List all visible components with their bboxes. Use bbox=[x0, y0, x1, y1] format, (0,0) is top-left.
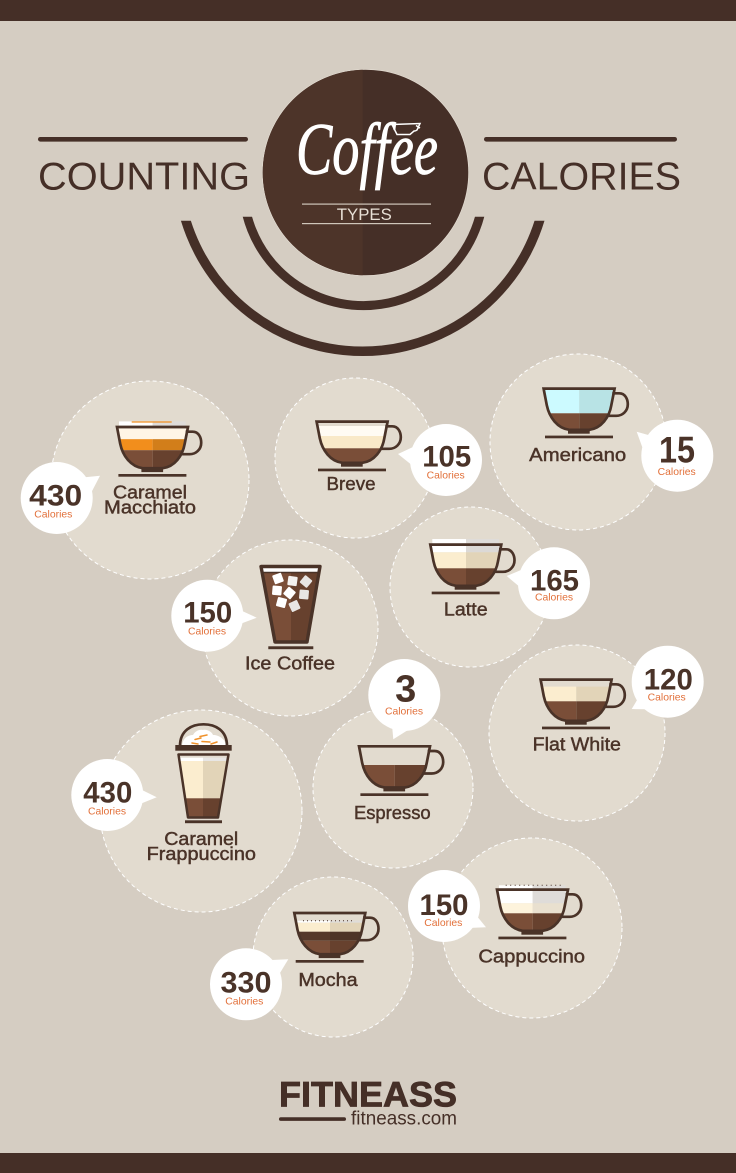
icon: espresso cup bbox=[358, 746, 443, 796]
title left bbox=[38, 137, 250, 198]
label: latte: Latte bbox=[444, 599, 488, 620]
circle: flat white bbox=[489, 645, 665, 821]
label: cappuccino: Cappuccino bbox=[478, 946, 585, 967]
callout: 150 bbox=[171, 580, 257, 652]
ice cubes bbox=[272, 572, 313, 612]
callout: 105 bbox=[398, 424, 482, 496]
icon: mocha cup bbox=[293, 913, 378, 963]
callout: 150: 150 bbox=[183, 596, 232, 629]
icon: ice coffee glass bbox=[255, 566, 326, 649]
dome lid bbox=[175, 724, 232, 751]
title badge: Coffee bbox=[296, 109, 438, 191]
icon: cappuccino cup bbox=[496, 885, 581, 939]
callout: 165 bbox=[507, 547, 590, 619]
callout: 430: 430 bbox=[83, 776, 132, 810]
callout: 105: 105 bbox=[422, 441, 471, 474]
logo: fitneass: FITNEASS bbox=[279, 1076, 457, 1115]
label: ice coffee: Ice Coffee bbox=[245, 652, 335, 673]
circle: cappuccino bbox=[442, 838, 622, 1018]
icon: latte cup bbox=[429, 539, 514, 594]
callout: 430 bbox=[21, 462, 100, 534]
logo: fitneass: fitneass.com bbox=[351, 1108, 457, 1129]
callout: 15: 15 bbox=[659, 430, 695, 471]
callout: 150: 150 bbox=[420, 889, 468, 922]
icon: breve cup bbox=[315, 422, 401, 471]
circle: espresso bbox=[313, 708, 473, 868]
callout: 330 bbox=[210, 948, 288, 1020]
label: americano: Americano bbox=[529, 444, 626, 465]
label: caramel frappuccino bbox=[147, 828, 256, 864]
title right bbox=[482, 137, 681, 198]
circle: mocha bbox=[253, 877, 413, 1037]
callout: 3: Calories bbox=[385, 706, 423, 717]
callout: 15: Calories bbox=[658, 467, 696, 478]
callout: 330: 330 bbox=[220, 966, 272, 999]
callout: 430: 430 bbox=[29, 480, 82, 513]
circle: latte bbox=[390, 507, 550, 667]
icon: flat white cup bbox=[539, 680, 625, 729]
saucer arcs bbox=[180, 216, 544, 356]
title right: CALORIES bbox=[482, 156, 681, 198]
label: caramel macchiato: Caramel bbox=[113, 481, 187, 502]
callout: 430 bbox=[71, 759, 157, 831]
callout: 150: Calories bbox=[424, 918, 462, 929]
label: caramel frappuccino: Caramel bbox=[164, 828, 238, 849]
label: flat white: Flat White bbox=[533, 734, 621, 755]
callout: 120: 120 bbox=[644, 663, 693, 696]
callout: 3: 3 bbox=[395, 669, 416, 711]
icon: caramel macchiato cup bbox=[116, 421, 201, 477]
icon: americano cup bbox=[542, 389, 628, 438]
circle: caramel macchiato bbox=[51, 381, 249, 579]
icon: small cup bbox=[392, 124, 420, 134]
callout: 430: Calories bbox=[88, 806, 126, 818]
callout: 150: Calories bbox=[188, 626, 226, 637]
circle: americano bbox=[490, 354, 666, 530]
label: caramel macchiato bbox=[104, 481, 196, 517]
label: espresso: Espresso bbox=[354, 802, 431, 823]
header bbox=[38, 69, 680, 356]
title badge bbox=[262, 69, 469, 276]
bottom bar bbox=[0, 1153, 736, 1173]
callout: 105: Calories bbox=[427, 471, 465, 482]
icon: caramel frappuccino cup bbox=[175, 724, 232, 823]
circle: breve bbox=[275, 378, 435, 538]
circle: ice coffee bbox=[202, 540, 378, 716]
label: caramel macchiato: Macchiato bbox=[104, 496, 196, 517]
circle: caramel frappuccino bbox=[100, 710, 302, 912]
callout: 330: Calories bbox=[225, 996, 263, 1007]
callout: 430: Calories bbox=[34, 510, 72, 521]
label: breve: Breve bbox=[326, 473, 376, 494]
label: mocha: Mocha bbox=[298, 969, 358, 990]
top bar bbox=[0, 0, 736, 21]
title badge: TYPES bbox=[337, 205, 392, 224]
callout: 165: Calories bbox=[535, 592, 573, 603]
callout: 120: Calories bbox=[648, 693, 686, 704]
title left: COUNTING bbox=[38, 156, 250, 198]
label: caramel frappuccino: Frappuccino bbox=[147, 843, 256, 864]
callout: 15 bbox=[637, 420, 713, 492]
callout: 120 bbox=[632, 646, 704, 718]
callout: 165: 165 bbox=[530, 564, 579, 597]
callout: 150 bbox=[408, 870, 486, 942]
callout: 3 bbox=[368, 659, 440, 739]
